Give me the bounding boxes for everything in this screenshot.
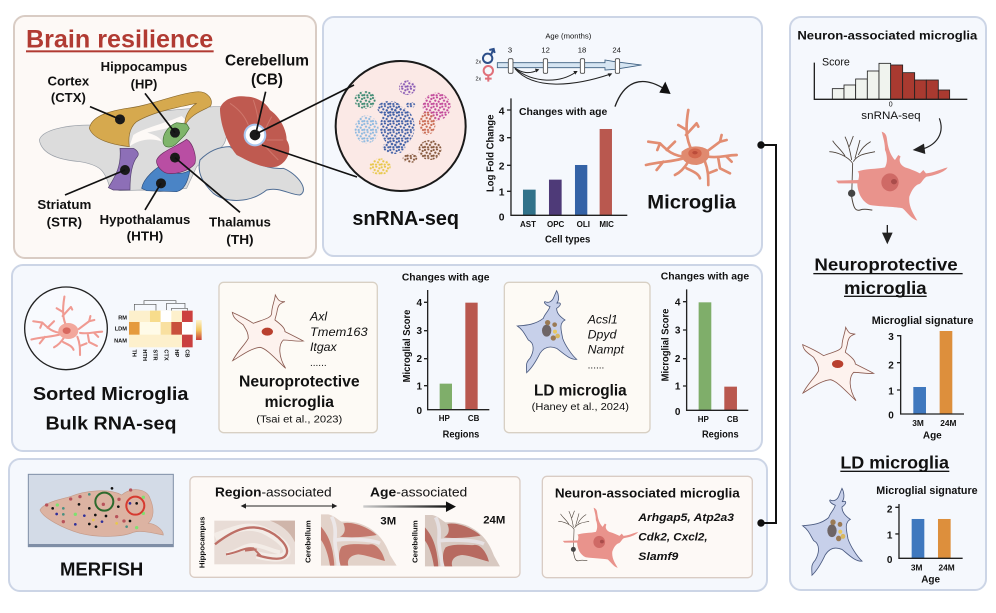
heading: snRNA-seq: snRNA-seq — [352, 208, 459, 230]
card: neuron-associated microglia — [542, 476, 752, 578]
heading: Neuroprotective microglia: microglia — [844, 278, 928, 298]
aging timeline: 2x — [475, 59, 481, 65]
brain region labels: Cortex — [47, 74, 89, 88]
bar chart: log fold change by cell type: 4 — [499, 107, 505, 118]
arrow: histogram to cells — [913, 118, 941, 154]
aging timeline: Age (months) — [545, 31, 592, 40]
aging timeline: 18 — [578, 45, 586, 54]
heading: LD microglia: LD microglia — [840, 452, 950, 472]
bar chart: neuroprotective signature by age: 24M — [940, 418, 956, 428]
zoom lines: cerebellum to UMAP circle — [256, 85, 357, 177]
bar chart: log fold change by cell type: OPC — [547, 220, 565, 229]
connector: MERFISH and microglia panels to summary — [757, 141, 776, 527]
brain region labels: (HP) — [131, 78, 157, 92]
panel: brain resilience — [14, 16, 316, 258]
icon: sorted microglia circle — [25, 287, 107, 370]
bar chart: neuroprotective score by region: 3 — [417, 326, 423, 337]
bar chart: neuroprotective signature by age: 3 — [888, 332, 894, 343]
bar chart: LD score by region: CB — [727, 415, 739, 424]
heatmap: NAM — [114, 338, 127, 344]
card: neuroprotective microglia: microglia — [265, 394, 334, 411]
card: region and age associated: Age-associated — [370, 484, 467, 499]
bar chart: LD score by region: Microglial Score — [660, 308, 671, 381]
card: neuroprotective microglia: (Tsai et al., 2023) — [256, 414, 342, 425]
bar chart: LD score by region: HP — [698, 415, 710, 424]
brain region labels: (STR) — [47, 215, 82, 229]
panel: snRNA-seq — [323, 17, 762, 256]
heatmap: TH — [130, 349, 136, 357]
card: neuroprotective microglia: Tmem163 — [310, 325, 368, 339]
brain region labels: (TH) — [226, 233, 254, 247]
aging timeline: 2x — [475, 77, 481, 83]
bar chart: LD signature by age: 3M — [911, 563, 922, 573]
cerebellum section 24M — [425, 515, 500, 566]
aging timeline: 24 — [612, 45, 622, 54]
bar chart: neuroprotective score by region: 4 — [417, 298, 423, 309]
bar chart: LD score by region: 0 — [675, 407, 681, 418]
bar chart: LD score by region: 1 — [675, 381, 681, 392]
bar chart: neuroprotective score by region: 2 — [417, 354, 423, 365]
heading: Neuroprotective microglia — [813, 255, 963, 298]
card: region and age associated: Hippocampus — [198, 516, 207, 568]
card: neuron-associated microglia: Slamf9 — [638, 551, 679, 563]
hippocampus section — [214, 521, 295, 564]
card: LD microglia: ...... — [588, 360, 604, 371]
bar chart: log fold change by cell type: 3 — [499, 134, 505, 145]
bar chart: log fold change by cell type: 2 — [499, 161, 505, 172]
cerebellum section 3M — [321, 514, 397, 566]
card: neuroprotective microglia: Itgax — [310, 340, 338, 354]
card: neuroprotective microglia — [219, 282, 377, 433]
bar chart: neuroprotective score by region: Changes with age — [402, 273, 490, 284]
card: region and age associated: Cerebellum — [410, 520, 419, 563]
bar chart: neuroprotective score by region: HP — [439, 414, 451, 423]
card: LD microglia — [504, 282, 650, 433]
card: neuron-associated microglia: Neuron-associated microglia — [555, 486, 741, 500]
bar chart: LD signature by age: 24M — [939, 563, 955, 573]
aging timeline: 12 — [541, 45, 550, 54]
card: LD microglia: Dpyd — [588, 328, 618, 342]
bar chart: neuroprotective score by region: Regions — [443, 429, 479, 440]
bar chart: LD score by region: Changes with age — [661, 272, 750, 283]
bar chart: LD signature by age — [876, 485, 978, 586]
heatmap — [114, 301, 202, 361]
bar chart: neuroprotective signature by age: 3M — [912, 418, 924, 428]
bar chart: log fold change by cell type: 0 — [499, 212, 505, 223]
arrow: down — [882, 225, 893, 244]
bar chart: LD signature by age: 2 — [887, 504, 893, 515]
bar chart: neuroprotective score by region — [402, 273, 490, 440]
heading: Sorted Microglia Bulk RNA-seq: Bulk RNA-seq — [45, 412, 176, 433]
card: region and age associated: Cerebellum — [304, 520, 313, 563]
brain region labels: (HTH) — [127, 230, 163, 244]
heatmap: LDM — [115, 327, 127, 333]
bar chart: neuroprotective signature by age: 2 — [888, 360, 894, 371]
panel: sorted microglia bulk RNA-seq — [12, 265, 762, 451]
bar chart: neuroprotective signature by age — [872, 315, 974, 442]
heatmap: HP — [173, 349, 179, 357]
bar chart: LD signature by age: 1 — [887, 531, 893, 542]
bar chart: neuroprotective signature by age: 0 — [888, 410, 894, 421]
card: region and age associated: 24M — [483, 515, 505, 527]
bar chart: LD score by region — [660, 272, 750, 441]
bar chart: LD signature by age: Microglial signature — [876, 485, 978, 497]
histogram: score: 0 — [889, 102, 893, 109]
bar chart: LD signature by age: 0 — [887, 555, 893, 566]
card: neuroprotective microglia: Neuroprotective — [239, 373, 360, 390]
bar chart: neuroprotective score by region: 1 — [417, 381, 423, 392]
card: neuroprotective microglia: Axl — [309, 310, 328, 324]
brain region labels: (CB) — [251, 72, 283, 89]
card: region and age associated: Region-associated — [215, 484, 332, 499]
aging timeline — [475, 31, 642, 84]
bar chart: LD score by region: 2 — [675, 354, 681, 365]
card: LD microglia: LD microglia — [534, 382, 627, 399]
brain anatomy diagram — [39, 92, 303, 212]
card: LD microglia: Nampt — [588, 343, 625, 357]
bar chart: log fold change by cell type — [485, 98, 627, 246]
histogram: score — [814, 57, 967, 122]
title: Brain resilience: Brain resilience — [26, 26, 213, 54]
heading: MERFISH: MERFISH — [60, 559, 143, 580]
brain region labels: Hypothalamus — [100, 213, 190, 227]
bar chart: neuroprotective score by region: Microglial Score — [402, 309, 413, 382]
heading: Sorted Microglia Bulk RNA-seq — [33, 383, 189, 433]
heatmap: RM — [118, 315, 127, 321]
card: neuron-associated microglia: Cdk2, Cxcl2, — [638, 532, 708, 544]
icon: neuron and microglia — [829, 132, 948, 221]
heatmap: HTH — [141, 349, 147, 361]
bar chart: log fold change by cell type: OLI — [577, 220, 590, 229]
panel: MERFISH — [9, 459, 767, 591]
card: LD microglia: Acsl1 — [587, 312, 618, 326]
heatmap: CTX — [162, 349, 168, 361]
MERFISH slide with brain tissue — [28, 474, 173, 547]
card: neuroprotective microglia: ...... — [310, 358, 327, 369]
UMAP cluster circle — [336, 61, 466, 191]
bar chart: log fold change by cell type: Cell types — [545, 235, 590, 246]
heading: Sorted Microglia Bulk RNA-seq: Sorted Microglia — [33, 383, 189, 404]
brain region labels: Thalamus — [209, 215, 271, 229]
brain region labels: Hippocampus — [101, 60, 187, 74]
icon: microglia — [646, 110, 737, 185]
bar chart: LD score by region: 3 — [675, 326, 681, 337]
bar chart: LD score by region: 4 — [675, 297, 681, 308]
bar chart: log fold change by cell type: Log Fold Change — [485, 114, 496, 192]
aging timeline: 3 — [508, 45, 512, 54]
icon: neuroprotective microglia cell — [803, 327, 874, 401]
histogram: score: snRNA-seq — [861, 110, 921, 122]
bar chart: log fold change by cell type: AST — [520, 220, 536, 229]
bar chart: LD signature by age: Age — [921, 575, 941, 586]
bar chart: neuroprotective score by region: 0 — [417, 406, 423, 417]
bar chart: LD score by region: Regions — [702, 430, 739, 441]
bar chart: log fold change by cell type: 1 — [499, 187, 505, 198]
card: neuron-associated microglia: Arhgap5, Atp2a3 — [637, 512, 734, 524]
card: region and age associated: 3M — [380, 515, 396, 527]
histogram: score: Score — [822, 57, 850, 69]
bar chart: log fold change by cell type: MIC — [599, 220, 614, 229]
card: LD microglia: (Haney et al., 2024) — [532, 402, 629, 413]
brain region labels: (CTX) — [51, 91, 86, 105]
heading: Microglia: Microglia — [647, 192, 736, 213]
heatmap: CB — [184, 349, 190, 357]
bar chart: neuroprotective score by region: CB — [468, 414, 480, 423]
heading: Neuroprotective microglia: Neuroprotective — [814, 255, 958, 275]
card: region and age associated — [190, 477, 520, 577]
bar chart: neuroprotective signature by age: Age — [923, 431, 942, 442]
panel: neuron-associated microglia summary — [790, 17, 986, 590]
bar chart: log fold change by cell type: Changes with age — [519, 107, 608, 118]
heading: Neuron-associated microglia: Neuron-associated microglia — [797, 28, 978, 42]
bar chart: neuroprotective signature by age: 1 — [888, 386, 894, 397]
brain region labels: Cerebellum — [225, 52, 309, 69]
icon: LD microglia cell — [803, 488, 862, 575]
brain region labels — [37, 52, 309, 247]
brain region labels: Striatum — [37, 198, 91, 212]
arrow: bar chart to microglia — [615, 82, 671, 107]
heatmap: STR — [152, 349, 158, 361]
bar chart: neuroprotective signature by age: Microglial signature — [872, 315, 974, 327]
